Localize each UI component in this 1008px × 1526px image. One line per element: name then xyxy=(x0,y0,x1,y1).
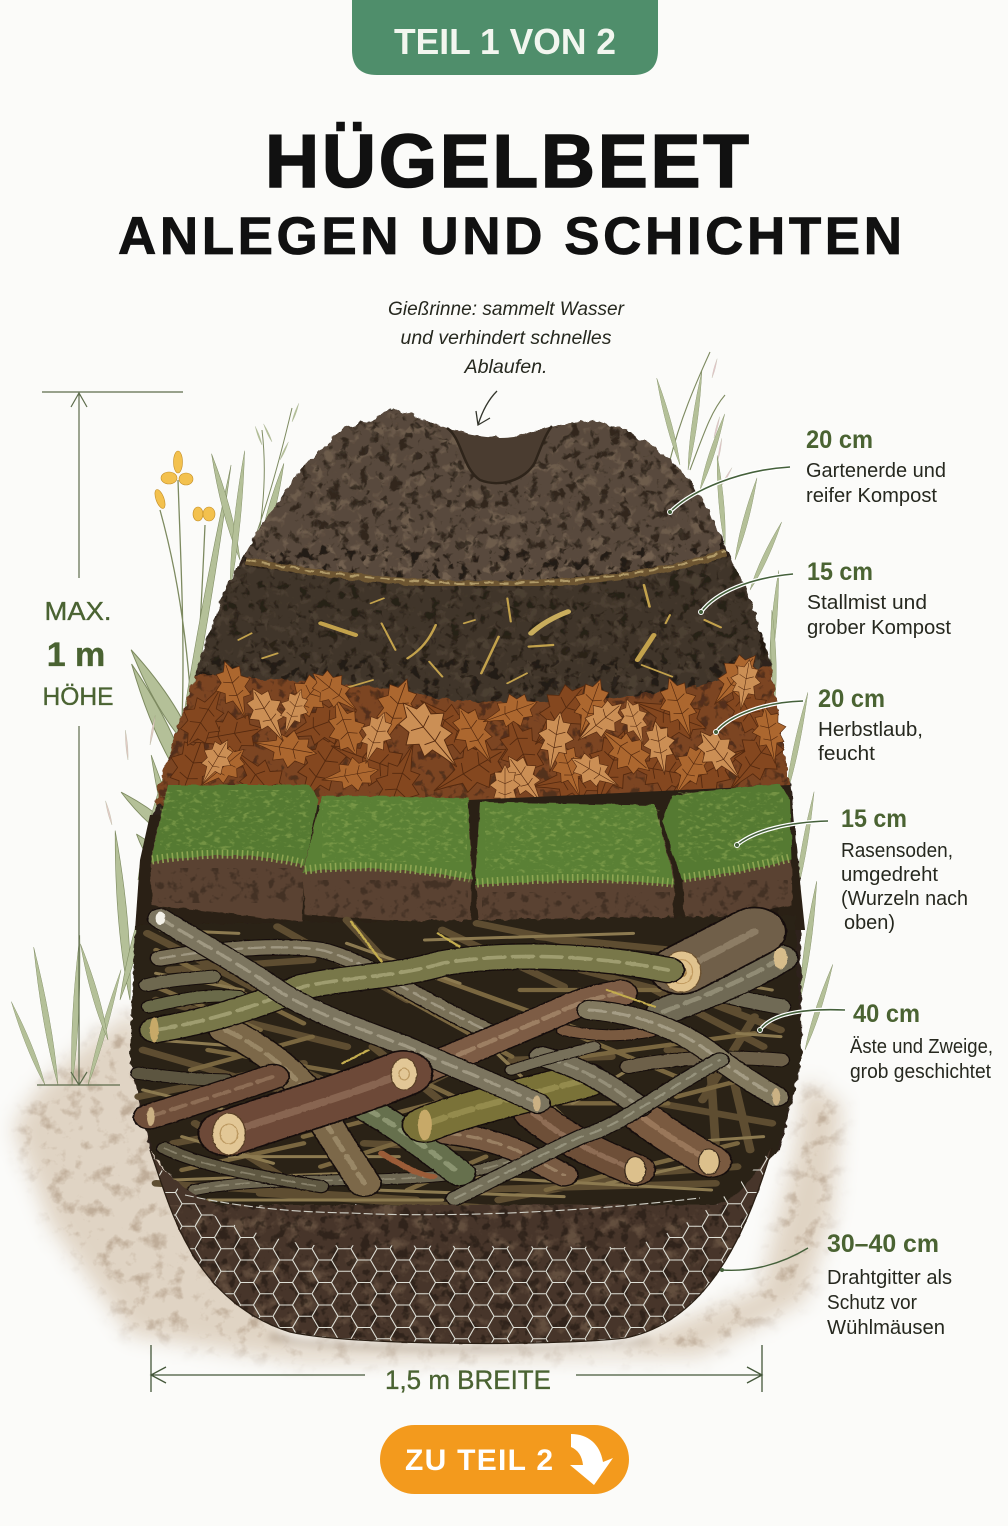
branch: low dark xyxy=(165,1148,321,1187)
layer: branches and twigs xyxy=(130,912,802,1210)
callout: 20 cm leaves: feucht xyxy=(818,743,875,765)
mound: soil and leaf layers xyxy=(120,400,820,1160)
layer: garden soil and compost xyxy=(220,405,730,583)
layer: soil in wire basket xyxy=(150,1148,775,1350)
dimension: 1,5 m width: 1,5 m BREITE xyxy=(385,1365,551,1395)
branch: right stubs xyxy=(564,995,781,1067)
sod 2 xyxy=(303,795,472,925)
branch: green grey lower xyxy=(369,1110,460,1173)
callout: 20 cm garden soil: reifer Kompost xyxy=(806,485,937,507)
badge: Teil 1 von 2: TEIL 1 VON 2 xyxy=(394,21,616,62)
badge: Teil 1 von 2 xyxy=(352,0,658,75)
branch: long olive xyxy=(156,957,668,1030)
callout: 40 cm branches xyxy=(758,1000,993,1083)
plants: right grasses xyxy=(654,352,835,1060)
dimension: 1,5 m width xyxy=(151,1345,762,1395)
branch: right grey log xyxy=(663,948,787,1012)
callout: 30-40 cm wire mesh: Drahtgitter als xyxy=(827,1267,952,1289)
icon: curved down arrow xyxy=(570,1434,613,1485)
note: Gießrinne xyxy=(388,298,625,378)
layer: wet autumn leaves base xyxy=(150,660,800,810)
branch: thin grey xyxy=(512,1047,594,1070)
title: ANLEGEN UND SCHICHTEN xyxy=(118,207,902,266)
branch: thin twisting grey xyxy=(455,1060,720,1198)
main branches xyxy=(139,912,787,1198)
callout: 20 cm garden soil: 20 cm xyxy=(806,426,873,454)
callout: 15 cm turf: umgedreht xyxy=(841,864,938,886)
log: upper right with cut end xyxy=(663,932,755,992)
branch: upper left stubs xyxy=(147,977,238,1007)
small accents xyxy=(147,912,780,1177)
layer: turned turf sods xyxy=(135,783,805,935)
title: HÜGELBEET xyxy=(265,119,749,203)
callout: 15 cm manure xyxy=(698,558,951,639)
plants: left flowers and grasses xyxy=(9,403,300,1086)
branch: long brown left xyxy=(150,1077,273,1117)
autumn leaves xyxy=(155,643,797,824)
callout: 30-40 cm wire mesh: Schutz vor xyxy=(827,1292,917,1314)
branch: diagonal brown centre xyxy=(416,993,620,1073)
dimension: max. 1 m height: 1 m xyxy=(47,636,105,674)
callout: 15 cm manure: grober Kompost xyxy=(807,617,951,639)
callout: 40 cm branches: Äste und Zweige, xyxy=(850,1036,993,1058)
callout: 15 cm turf: (Wurzeln nach xyxy=(841,888,968,910)
button: Zu Teil 2: ZU TEIL 2 xyxy=(405,1444,553,1477)
dimension: max. 1 m height: MAX. xyxy=(44,596,112,626)
callout: 20 cm leaves: Herbstlaub, xyxy=(818,719,923,741)
branch: upper grey xyxy=(160,947,486,1030)
dimension: max. 1 m height: HÖHE xyxy=(42,683,114,711)
branch: thick left stem xyxy=(225,1030,364,1183)
callout: 30-40 cm wire mesh xyxy=(720,1230,952,1339)
note: Gießrinne: Gießrinne: sammelt Wasser xyxy=(388,298,625,320)
title xyxy=(118,119,902,266)
branch: centre brown xyxy=(447,1133,564,1175)
callout: 15 cm turf: 15 cm xyxy=(841,805,907,833)
sod grass and soil texture xyxy=(152,790,790,930)
log: lower centre brown xyxy=(533,1113,646,1183)
note: Gießrinne: Ablaufen. xyxy=(463,356,548,378)
rope line between soil layers xyxy=(246,551,726,584)
arrow: Gießrinne pointer xyxy=(476,391,497,425)
log: lower right brown xyxy=(642,1117,719,1174)
log: olive xyxy=(418,1080,585,1140)
sod 4 xyxy=(662,783,792,925)
branch: pale right diagonal xyxy=(542,1057,640,1107)
callout: 15 cm manure: Stallmist und xyxy=(807,592,927,614)
callout: 15 cm turf: oben) xyxy=(844,912,895,934)
sod 1 xyxy=(150,785,318,922)
callout: 30-40 cm wire mesh: 30–40 cm xyxy=(827,1230,939,1258)
branch: lower left dark xyxy=(139,1073,225,1080)
branch: long pale diagonal xyxy=(160,918,538,1103)
callout: 20 cm leaves xyxy=(714,685,923,765)
callout: 15 cm turf xyxy=(734,805,968,934)
callout: 20 cm garden soil xyxy=(668,426,946,514)
callout: 30-40 cm wire mesh: Wühlmäusen xyxy=(827,1317,945,1339)
callout: 15 cm manure: 15 cm xyxy=(807,558,873,586)
branch: rear grey xyxy=(195,1157,525,1190)
callout: 40 cm branches: grob geschichtet xyxy=(850,1061,991,1083)
thin twigs background xyxy=(139,920,781,1210)
dimension: max. 1 m height xyxy=(37,392,183,1085)
note: Gießrinne: und verhindert schnelles xyxy=(400,327,612,349)
log: large front with cut ends xyxy=(212,1058,417,1155)
icon: yellow flowers xyxy=(153,451,215,521)
layer: manure and coarse compost xyxy=(190,548,770,708)
branch: pale right arc xyxy=(590,1010,776,1097)
callout: 15 cm turf: Rasensoden, xyxy=(841,840,953,862)
wire mesh basket xyxy=(145,1148,772,1350)
callout: 40 cm branches: 40 cm xyxy=(853,1000,920,1028)
sod 3 xyxy=(475,802,675,935)
water channel groove xyxy=(447,426,552,483)
straw bits in manure xyxy=(238,585,721,688)
callout: 20 cm leaves: 20 cm xyxy=(818,685,885,713)
callout: 20 cm garden soil: Gartenerde und xyxy=(806,460,946,482)
button: Zu Teil 2 xyxy=(380,1425,629,1494)
ground under mound xyxy=(0,1000,860,1380)
